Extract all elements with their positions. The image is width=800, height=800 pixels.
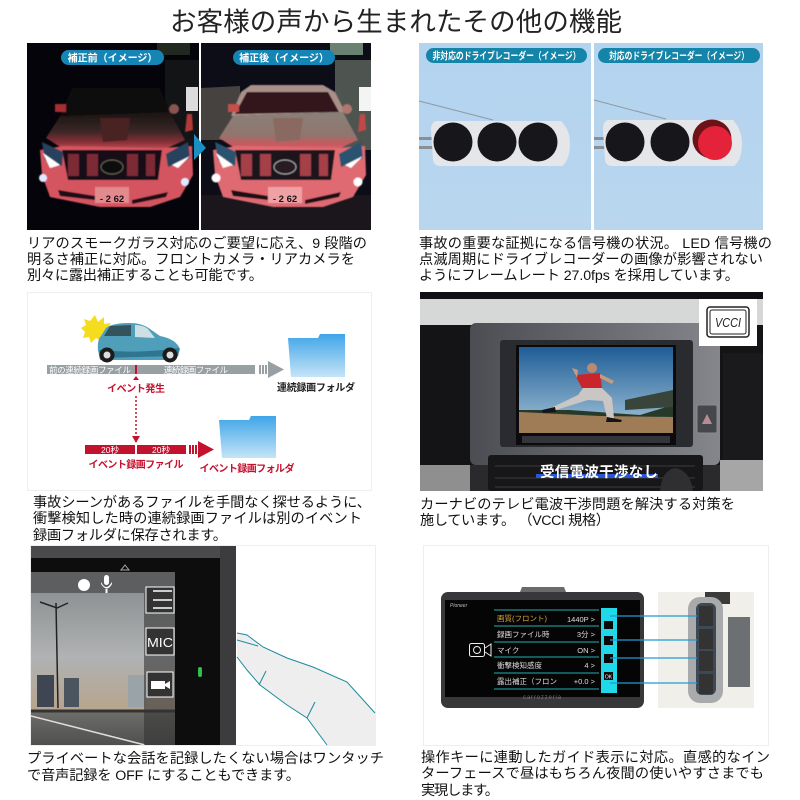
caption: guide display: ターフェースで昼はもちろん夜間の使いやすさまでも (421, 765, 764, 782)
caption: event folder (33, 495, 371, 544)
menu rows: 4 > (584, 661, 596, 670)
caption: smoke glass: 明るさ補正に対応。フロントカメラ・リアカメラを (27, 252, 355, 268)
connector lines: keys to guide (610, 616, 697, 683)
caption: smoke glass: リアのスモークガラス対応のご要望に応え、9 段階の (27, 236, 367, 252)
caption: guide display (421, 749, 770, 799)
photo: non-compatible recorder (419, 43, 591, 230)
button: MIC: MIC (147, 635, 173, 650)
badge: VCCI mark (699, 299, 757, 346)
icon: sun (81, 315, 111, 343)
guide column (601, 608, 617, 693)
pill label: non-compatible: 非対応のドライブレコーダー（イメージ） (432, 50, 580, 62)
button: MIC (146, 628, 174, 655)
photo: before correction (27, 43, 199, 230)
title: お客様の声から生まれたその他の機能 (170, 7, 622, 37)
caption: microphone off: プライベートな会話を記録したくない場合はワンタッチ (27, 750, 384, 767)
button: camera switch (147, 672, 173, 697)
panel: VCCI car navigation (420, 292, 763, 529)
pill label: before (61, 50, 164, 65)
caption: event folder: 事故シーンがあるファイルを手間なく探せるように、 (33, 495, 371, 511)
bar: event recording file: 20秒 (101, 445, 119, 455)
caption: VCCI: カーナビのテレビ電波干渉問題を解決する対策を (420, 496, 735, 513)
button: menu (146, 587, 174, 613)
arrow: to event folder (189, 441, 214, 458)
caption: guide display: 操作キーに連動したガイド表示に対応。直感的なイン (421, 749, 770, 766)
pill label: non-compatible (426, 48, 587, 63)
pill label: after (233, 50, 335, 65)
caption: traffic signal: 点滅周期にドライブレコーダーの画像が影響されない (419, 251, 763, 268)
icon: GPS and microphone (78, 575, 112, 593)
panel: one-touch microphone off (27, 546, 384, 784)
caption: guide display: 実現します。 (421, 783, 499, 799)
caption: event folder: 衝撃検知した時の連続録画ファイルは別のイベント (33, 510, 362, 527)
menu rows: 録画ファイル時 (497, 629, 550, 639)
caption: traffic signal: ようにフレームレート 27.0fps を採用しています。 (419, 268, 739, 284)
caption: traffic signal (419, 236, 772, 284)
menu rows: 衝撃検知感度 (497, 660, 542, 670)
panel: guide display (421, 546, 770, 799)
icon: car (98, 323, 180, 362)
menu rows: 画質(フロント) (497, 613, 547, 623)
indicator: green LED (198, 667, 202, 677)
label: event occurred: イベント発生 (107, 382, 165, 395)
pitcher (542, 363, 622, 422)
bar: continuous recording file: 連続録画ファイル (164, 365, 228, 375)
icon: event folder (219, 416, 276, 458)
illustration: finger (237, 633, 375, 745)
pill label: compatible (598, 48, 760, 63)
label: event file: イベント録画ファイル (88, 458, 184, 471)
icon: camera (470, 644, 491, 656)
bar: continuous recording file (47, 365, 255, 375)
menu rows: 3分 > (577, 630, 596, 639)
panel: LED traffic signal (419, 43, 772, 284)
bar: event recording file (85, 445, 186, 455)
guide column: OK (605, 674, 613, 680)
menu rows (497, 613, 596, 686)
photo: car navigation screen (420, 292, 763, 491)
badge: VCCI mark: VCCI (715, 315, 741, 330)
illustration frame (424, 546, 768, 746)
caption: VCCI: 施しています。 （VCCI 規格） (420, 513, 610, 529)
menu rows: ON > (577, 646, 596, 655)
caption: smoke glass (27, 236, 367, 284)
photo: physical keys (658, 592, 754, 708)
panel: rear smoke glass correction (27, 43, 371, 284)
panel: event recording diagram (28, 292, 372, 544)
caption: event folder: 録画フォルダに保存されます。 (33, 528, 227, 544)
menu rows: +0.0 > (574, 677, 596, 686)
illustration: dash camera: carrozzeria (523, 695, 562, 701)
photo: after correction (201, 43, 371, 230)
bar: event recording file: 20秒 (152, 445, 170, 455)
menu rows: マイク (497, 646, 519, 655)
caption: smoke glass: 別々に露出補正することも可能です。 (27, 268, 263, 284)
illustration: dash camera (441, 587, 644, 708)
photo: after correction: - 2 62 (273, 194, 297, 205)
diagram frame (28, 292, 372, 490)
photo: before correction: - 2 62 (100, 194, 124, 205)
arrow: event to event file (132, 396, 140, 443)
label: no reception interference: 受信電波干渉なし (540, 463, 658, 481)
caption: microphone off (27, 750, 384, 784)
device illustration (31, 546, 236, 745)
pill label: compatible: 対応のドライブレコーダー（イメージ） (609, 50, 749, 62)
arrow: before to after (194, 134, 206, 160)
caption: VCCI (420, 496, 735, 529)
pill label: before: 補正前（イメージ） (68, 52, 157, 64)
icon: continuous folder (288, 334, 345, 377)
photo: compatible recorder (594, 43, 763, 230)
caption: traffic signal: 事故の重要な証拠になる信号機の状況。 LED 信号機の (419, 236, 772, 252)
menu rows: 露出補正（フロン (497, 676, 557, 686)
bar: continuous recording file: 前の連続録画ファイル (49, 365, 131, 375)
label: continuous folder: 連続録画フォルダ (277, 381, 355, 394)
pill label: after: 補正後（イメージ） (239, 52, 329, 64)
label: event occurred (107, 376, 165, 395)
caption: microphone off: で音声記録を OFF にすることもできます。 (27, 767, 300, 784)
arrow: to continuous folder (259, 361, 284, 378)
label: event folder: イベント録画フォルダ (200, 462, 294, 475)
illustration frame (30, 546, 376, 746)
illustration: dash camera: Pioneer (450, 603, 468, 609)
menu rows: 1440P > (567, 615, 596, 624)
